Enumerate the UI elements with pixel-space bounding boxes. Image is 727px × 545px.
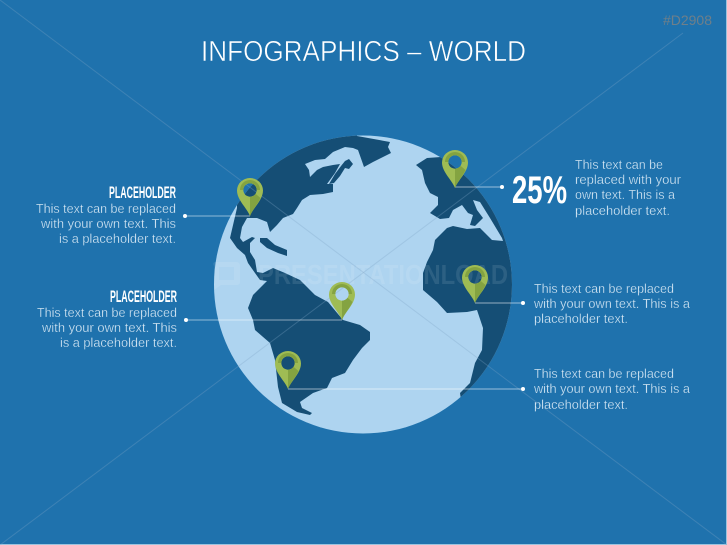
watermark logo bbox=[213, 262, 240, 290]
body text: This text can be replaced bbox=[36, 201, 176, 216]
text block: right top: replaced with your bbox=[575, 172, 682, 187]
body text: with your own text. This bbox=[41, 320, 177, 335]
heading: PLACEHOLDER bbox=[109, 184, 176, 202]
body text: is a placeholder text. bbox=[59, 231, 176, 246]
leader line: pin 4 bbox=[475, 301, 525, 305]
text block: right top bbox=[575, 157, 682, 218]
body text bbox=[36, 201, 176, 246]
text block: right bottom: placeholder text. bbox=[534, 397, 628, 412]
leader line: pin 5 bbox=[288, 387, 525, 391]
icon: map pin south america bbox=[275, 351, 301, 389]
body text: is a placeholder text. bbox=[60, 335, 177, 350]
icon: map pin africa bbox=[462, 265, 488, 303]
title: INFOGRAPHICS – WORLD bbox=[201, 36, 526, 68]
leader line: pin 1 bbox=[183, 214, 250, 218]
text block: right bottom: This text can be replaced bbox=[534, 366, 674, 381]
watermark text: PRESENTATIONLOAD bbox=[258, 259, 508, 290]
text block: right middle bbox=[533, 281, 691, 326]
land: caribbean island bbox=[260, 238, 287, 256]
continents bbox=[225, 130, 530, 415]
text block: right middle: This text can be replaced bbox=[534, 281, 674, 296]
body text: with your own text. This bbox=[40, 216, 176, 231]
text block: right top: This text can be bbox=[575, 157, 663, 172]
globe bbox=[214, 130, 530, 434]
leader line: pin 3 bbox=[455, 185, 504, 189]
product code tag: #D2908 bbox=[663, 12, 712, 28]
stat: 25%: 25% bbox=[512, 169, 567, 212]
text block: right top: own text. This is a bbox=[575, 187, 676, 202]
text block: right bottom bbox=[533, 366, 691, 412]
icon: map pin europe bbox=[442, 150, 468, 188]
text block: left bottom bbox=[37, 288, 177, 350]
text block: right middle: with your own text. This is a bbox=[533, 296, 691, 311]
text block: right top: placeholder text. bbox=[575, 203, 670, 218]
land: europe, asia and africa bbox=[416, 157, 512, 397]
text block: right middle: placeholder text. bbox=[534, 311, 628, 326]
icon: map pin brazil bbox=[329, 282, 355, 320]
body text bbox=[37, 305, 177, 350]
leader line: pin 2 bbox=[184, 318, 342, 322]
text block: left top bbox=[36, 184, 176, 246]
text block: right bottom: with your own text. This is a bbox=[533, 381, 691, 396]
body text: This text can be replaced bbox=[37, 305, 177, 320]
land: baffin island bbox=[329, 159, 353, 184]
heading: PLACEHOLDER bbox=[110, 288, 177, 306]
icon: map pin north america bbox=[237, 178, 263, 216]
land: north and south america bbox=[225, 130, 391, 415]
watermark bbox=[213, 259, 508, 290]
globe ocean bbox=[214, 136, 512, 434]
